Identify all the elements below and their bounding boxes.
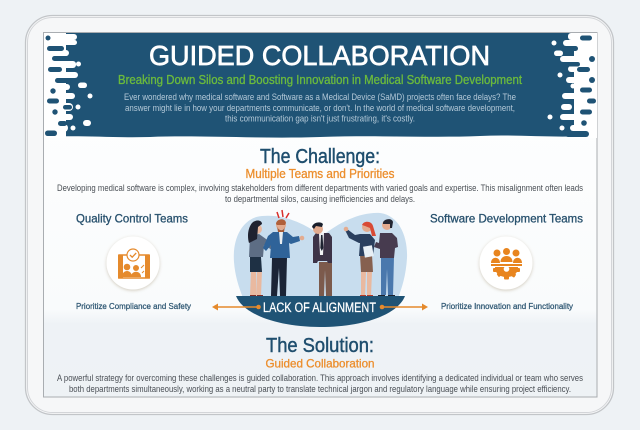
tablet screen xyxy=(44,32,597,397)
person: woman with red hair xyxy=(344,222,376,297)
challenge heading: The Challenge: xyxy=(260,146,380,168)
left team priority: Prioritize Compliance and Safety xyxy=(76,301,192,311)
illustration: lack of alignment xyxy=(234,210,407,327)
header banner xyxy=(44,33,597,138)
right white streaks xyxy=(548,33,597,138)
icon: quality control xyxy=(106,236,160,290)
banner bowl xyxy=(236,296,405,327)
solution heading: The Solution: xyxy=(266,335,374,357)
icon: software development xyxy=(480,236,532,290)
heart background xyxy=(234,213,407,298)
left team heading: Quality Control Teams xyxy=(76,212,188,226)
solution subheading: Guided Collaboration xyxy=(266,356,374,370)
person: man with blue jeans xyxy=(374,219,398,297)
right team heading: Software Development Teams xyxy=(430,212,583,226)
intro text: Ever wondered why medical software and Software as a Medical Device (SaMD) projects often face delays? The xyxy=(124,92,516,102)
left white streaks xyxy=(44,33,92,138)
intro text: this communication gap isn't just frustrating, it's costly. xyxy=(225,114,415,124)
solution paragraph: both departments simultaneously, working as a neutral party to translate technical jargon and regulatory language while ensuring project efficiency. xyxy=(69,384,571,394)
person: woman left xyxy=(248,220,275,297)
person: man in blue suit xyxy=(263,210,304,296)
banner text: LACK OF ALIGNMENT xyxy=(263,300,376,315)
intro text: answer might lie in how your departments communicate, or don't. In the world of medical software development, xyxy=(125,103,515,113)
subtitle: Breaking Down Silos and Boosting Innovation in Medical Software Development xyxy=(118,73,522,87)
arrow: right xyxy=(380,304,428,310)
title: GUIDED COLLABORATION xyxy=(149,40,490,71)
challenge paragraph xyxy=(57,183,583,204)
arrow: left xyxy=(212,304,261,310)
right team priority: Prioritize Innovation and Functionality xyxy=(441,301,574,311)
challenge paragraph: to departmental silos, causing inefficiencies and delays. xyxy=(225,194,415,204)
challenge subheading: Multiple Teams and Priorities xyxy=(246,167,394,181)
intro text xyxy=(124,92,516,124)
solution paragraph xyxy=(57,373,583,394)
person: man in centre xyxy=(312,222,332,296)
